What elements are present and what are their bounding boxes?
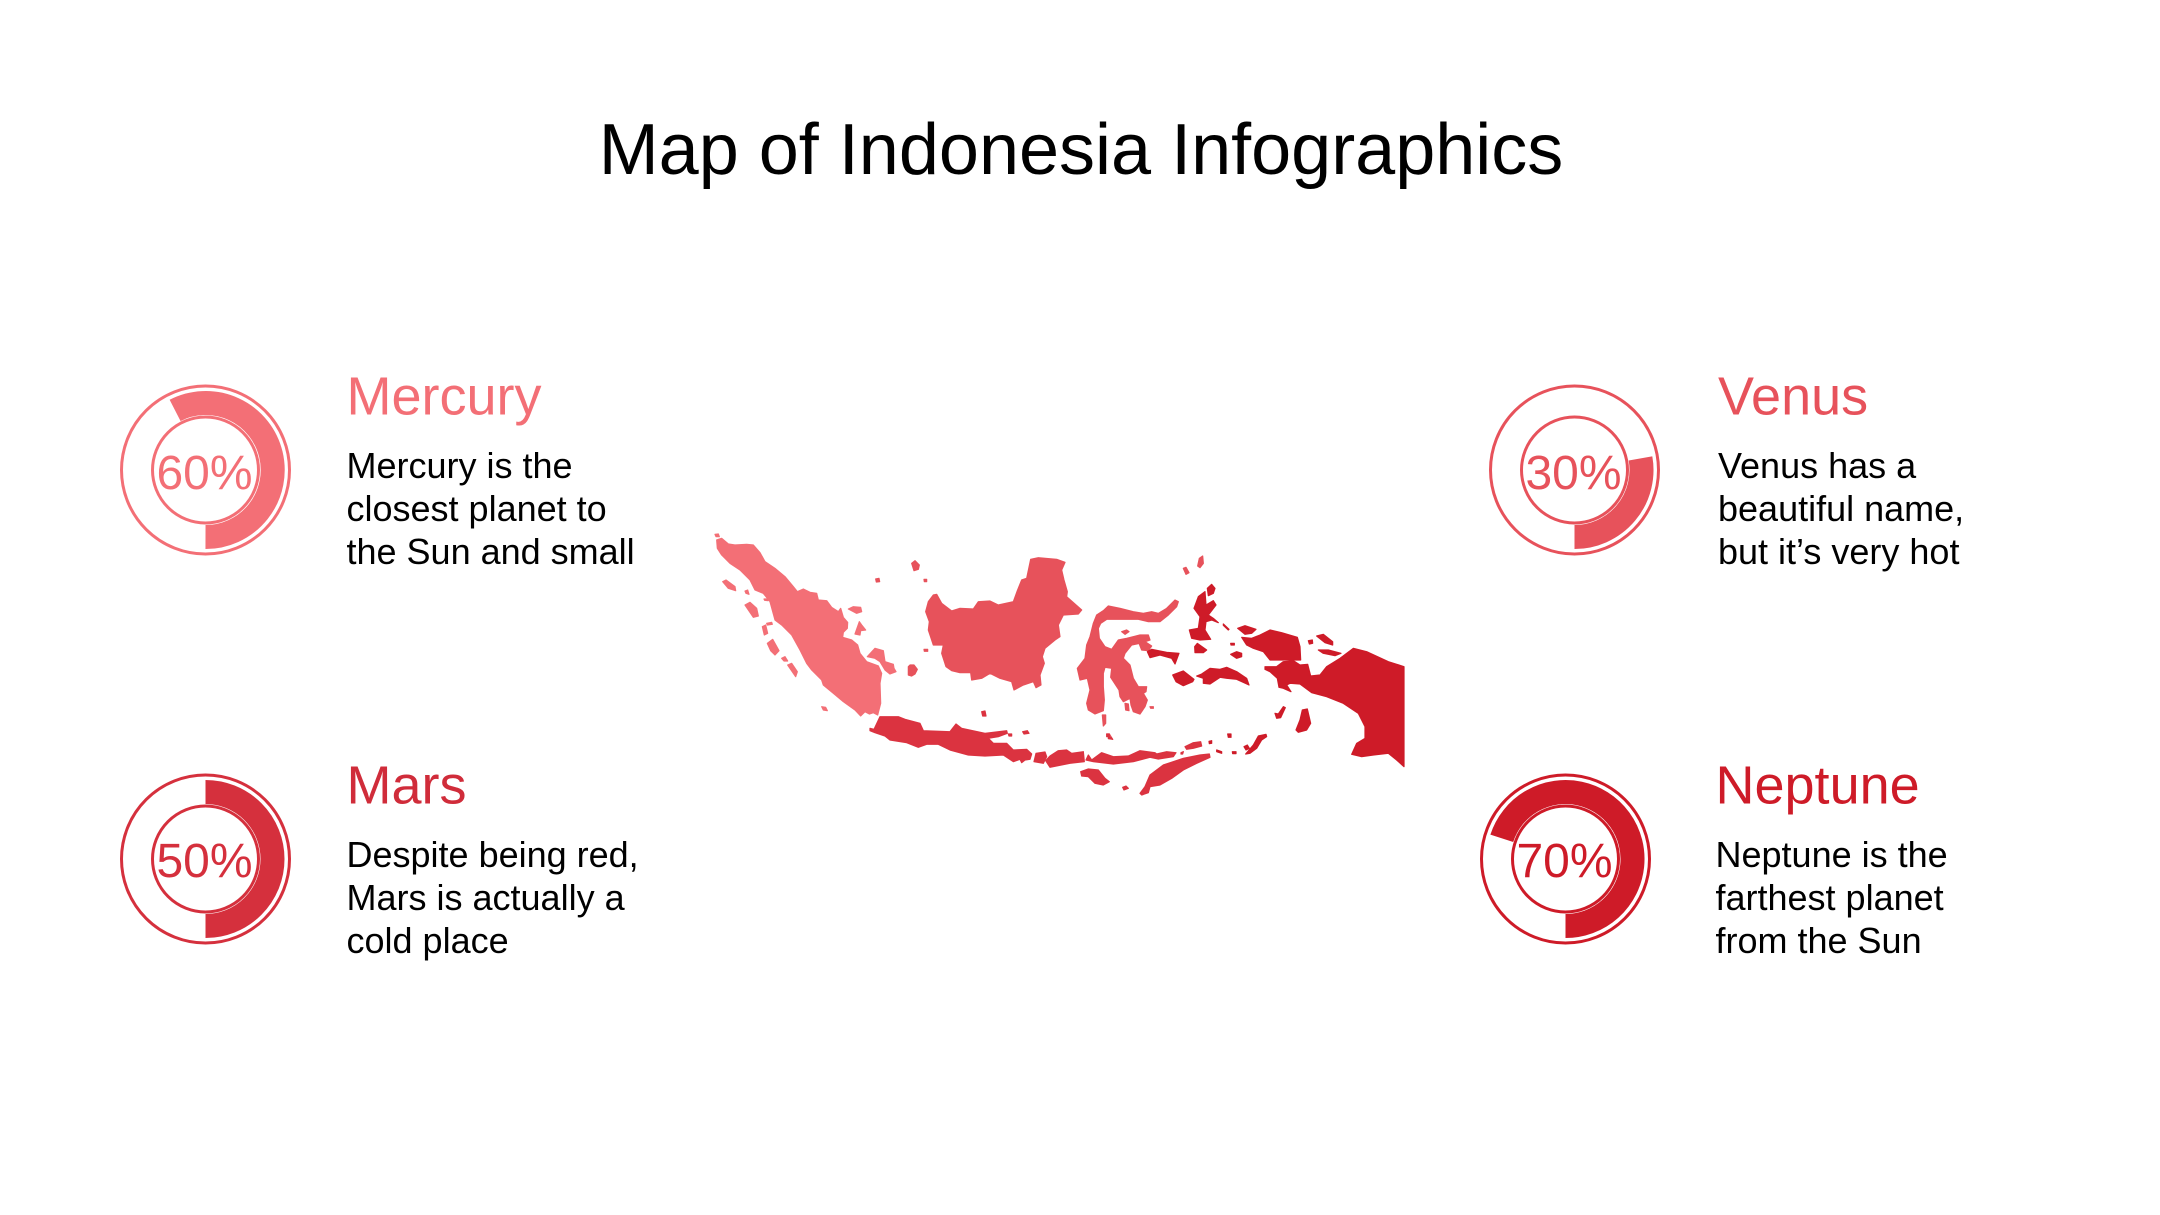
map region: Sumatra (715, 534, 896, 716)
text: Mars description: Mars is actually a (346, 877, 626, 918)
text: Neptune description: from the Sun (1716, 920, 1922, 961)
map region: Kalimantan and Sulawesi (876, 556, 1203, 739)
map region: Java and Lesser Sunda Islands (870, 711, 1210, 795)
heading: Mercury: Mercury (346, 366, 542, 426)
panel: Neptune (1482, 756, 1948, 961)
text: Mercury description: Mercury is the (346, 445, 573, 486)
donut chart: Mars 50%: 50% (156, 835, 253, 888)
panel: Mars (122, 756, 639, 961)
donut chart: Mercury 60%: 60% (156, 447, 253, 500)
map of Indonesia (715, 534, 1404, 795)
donut chart: Venus 30% (1490, 386, 1658, 554)
heading: Neptune: Neptune (1716, 756, 1920, 816)
panel: Mercury (122, 366, 635, 572)
text: Venus description: Venus has a (1718, 445, 1917, 486)
heading: Venus: Venus (1718, 366, 1868, 426)
heading: Mars: Mars (346, 756, 466, 816)
text: Mercury description: the Sun and small (346, 531, 635, 572)
title: Map of Indonesia Infographics (599, 110, 1563, 190)
donut chart: Neptune 70% (1482, 775, 1650, 943)
donut chart: Mercury 60% (122, 386, 290, 554)
text: Venus description: beautiful name, (1718, 488, 1964, 529)
text: Mars description: cold place (346, 920, 509, 961)
donut chart: Neptune 70%: 70% (1516, 835, 1613, 888)
donut chart: Mars 50% (122, 775, 290, 943)
text: Neptune description: farthest planet (1716, 877, 1944, 918)
text: Mercury description: closest planet to (346, 488, 607, 529)
panel: Venus (1490, 366, 1964, 572)
text: Neptune description: Neptune is the (1716, 834, 1948, 875)
map region: Maluku and Papua (1147, 584, 1404, 767)
text: Mars description: Despite being red, (346, 834, 639, 875)
text: Venus description: but it’s very hot (1718, 531, 1959, 572)
donut chart: Venus 30%: 30% (1525, 447, 1622, 500)
